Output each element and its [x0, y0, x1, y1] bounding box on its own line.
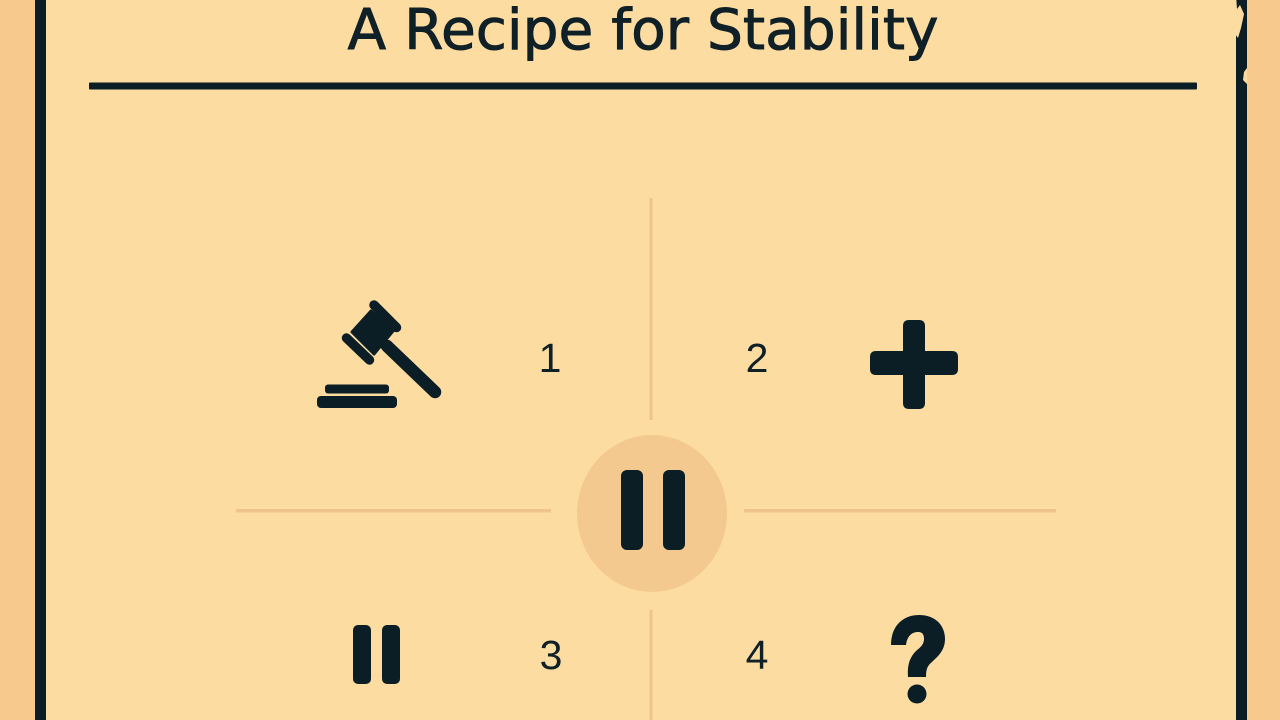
- number 4: 4: [746, 632, 768, 678]
- icon: plus: [870, 320, 958, 409]
- right border: [1235, 0, 1247, 720]
- icon: central pause badge: [577, 435, 727, 592]
- bottom vertical divider: [650, 610, 652, 720]
- top vertical divider: [650, 198, 652, 420]
- number 2: 2: [746, 335, 768, 381]
- number 3: 3: [540, 632, 562, 678]
- number 1: 1: [539, 335, 561, 381]
- right horizontal divider: [744, 509, 1056, 512]
- left border: [35, 0, 46, 720]
- icon: question mark: [891, 615, 945, 704]
- title underline: [89, 82, 1197, 90]
- left horizontal divider: [236, 509, 551, 512]
- icon: small pause: [353, 625, 400, 684]
- icon: gavel: [317, 305, 435, 408]
